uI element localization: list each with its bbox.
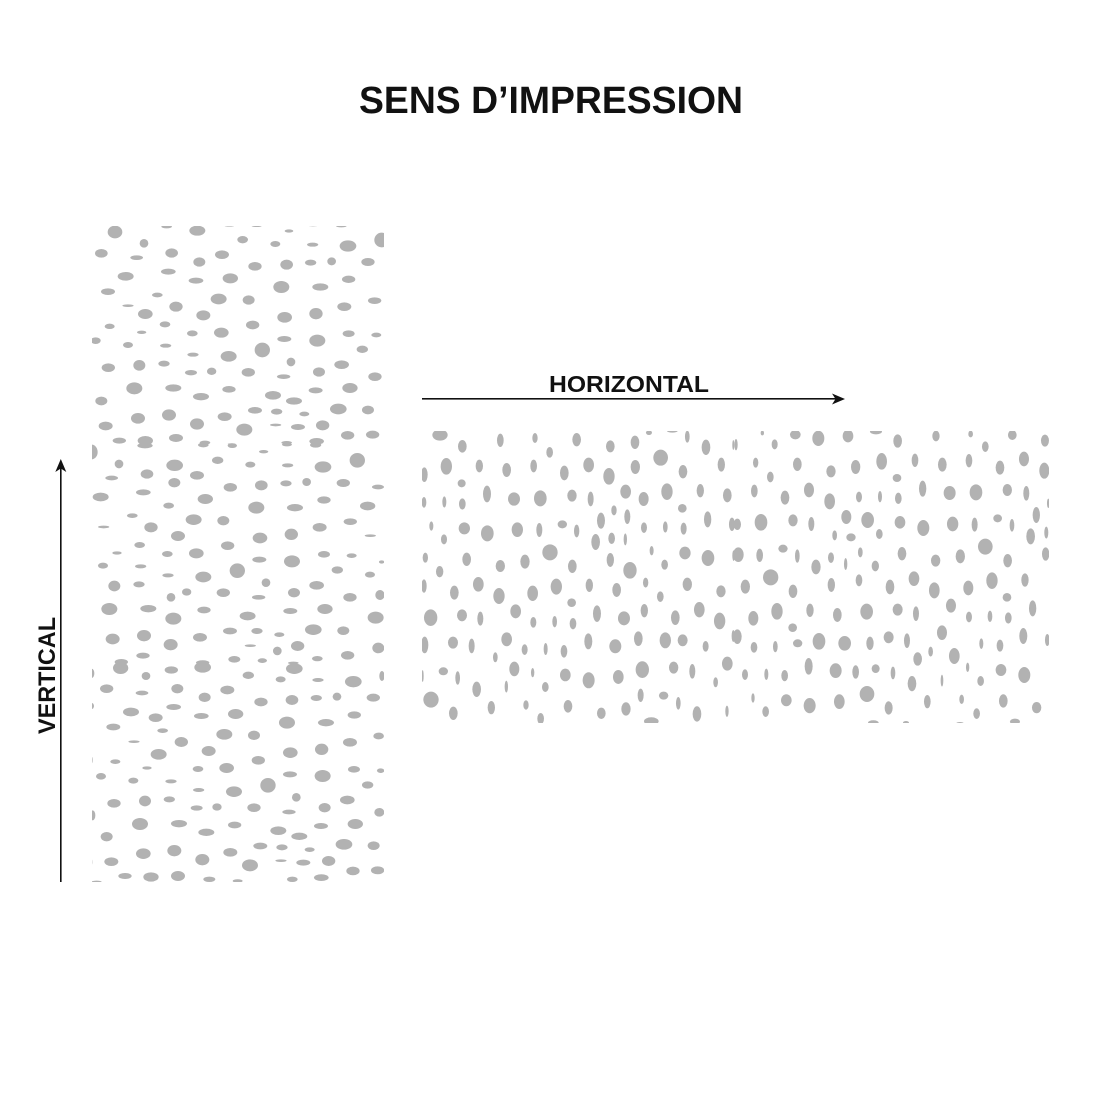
label: horizontal: HORIZONTAL <box>549 371 709 397</box>
panel: vertical pattern <box>86 225 389 883</box>
panel: horizontal pattern <box>421 429 1050 725</box>
label: vertical: VERTICAL <box>34 617 61 734</box>
arrow: horizontal <box>422 394 845 404</box>
title: SENS D’IMPRESSION <box>359 80 743 122</box>
arrow: vertical <box>55 459 66 882</box>
